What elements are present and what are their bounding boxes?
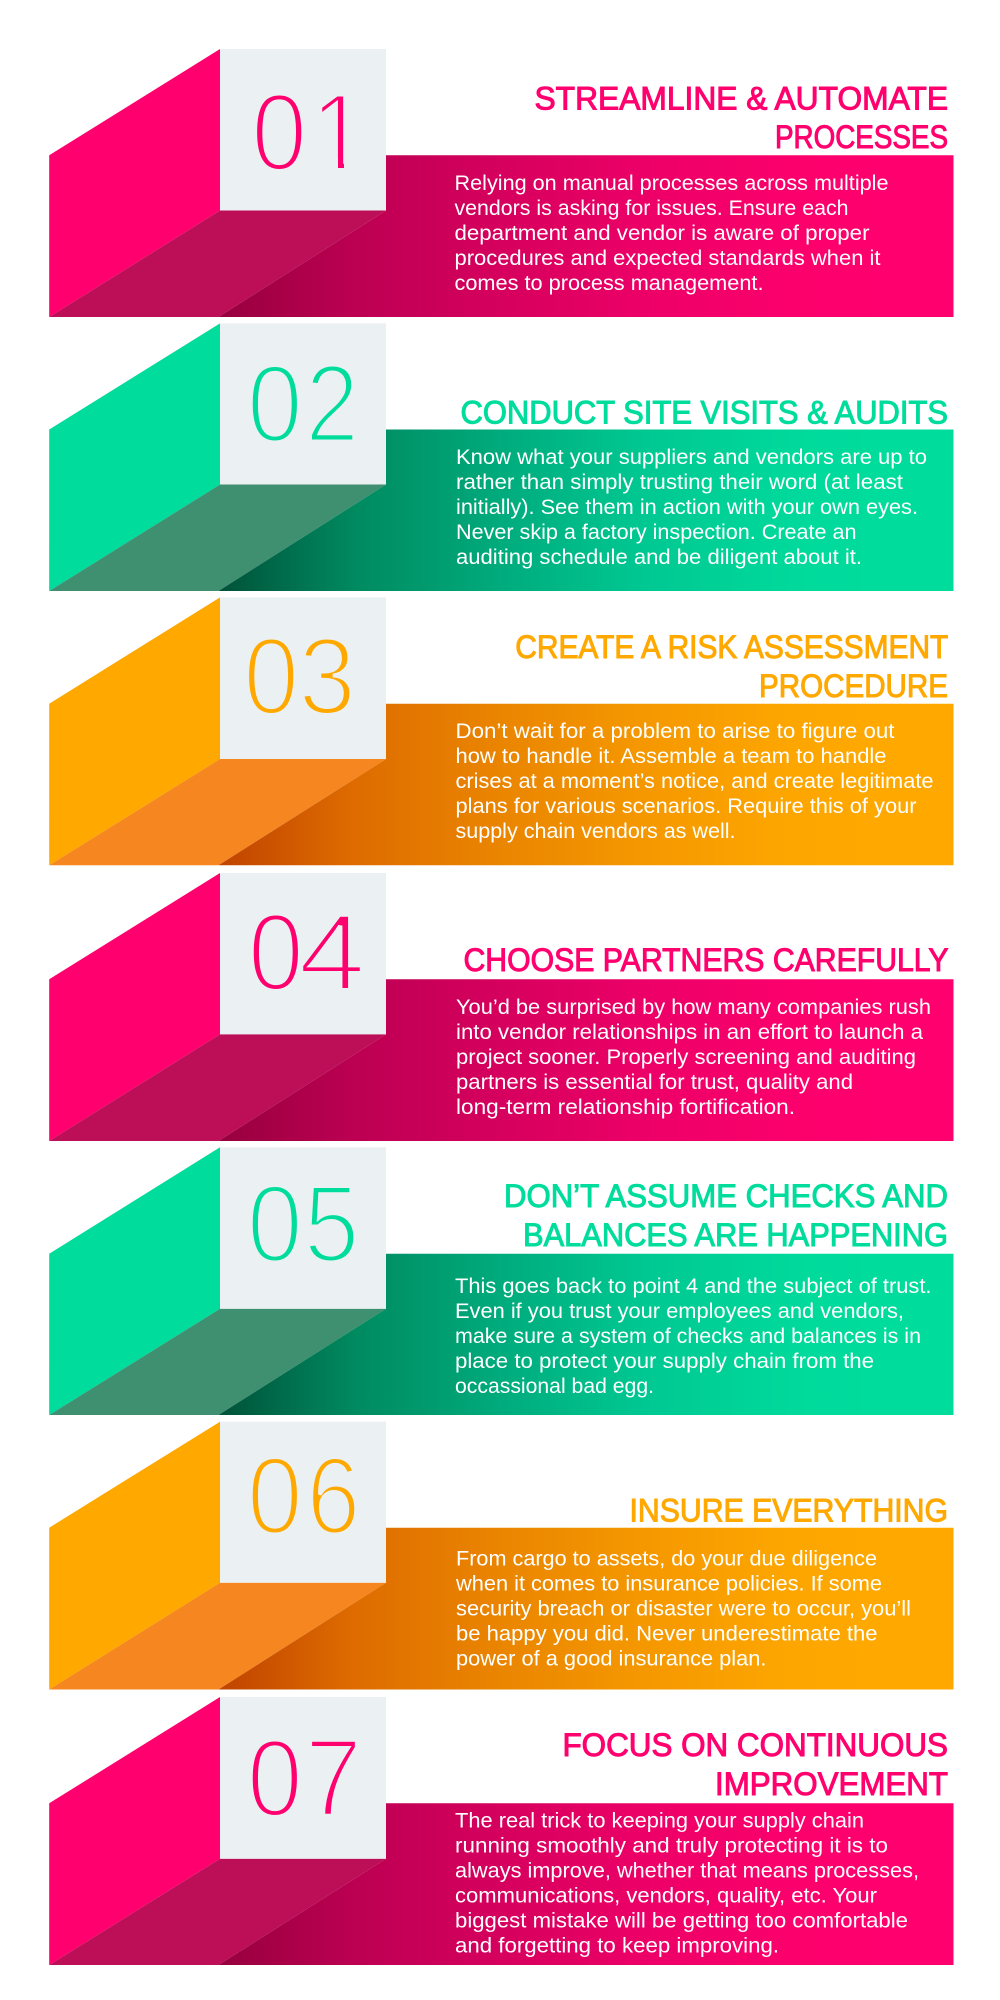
number 03 [243, 614, 356, 738]
left face [49, 597, 220, 865]
gradient bar [218, 979, 954, 1141]
body text: vendors is asking for issues. Ensure each [454, 196, 848, 220]
panel: 01 streamline and automate processes [49, 49, 953, 317]
gradient bar [218, 1528, 954, 1690]
heading: IMPROVEMENT [715, 1766, 948, 1802]
panel: 05 do not assume checks and balances are happening [49, 1147, 953, 1415]
floor face [49, 484, 386, 591]
body text: The real trick to keeping your supply chain [455, 1808, 864, 1832]
body text [456, 995, 931, 1119]
number 06: 6 [306, 1434, 360, 1557]
body text: comes to process management. [454, 271, 764, 295]
body text [455, 1274, 932, 1398]
number tile [220, 1422, 386, 1583]
left face [49, 49, 220, 317]
heading: PROCESSES [775, 119, 948, 155]
number tile [220, 1697, 386, 1859]
number 01: 0 [251, 72, 307, 194]
gradient bar [218, 704, 954, 865]
floor face [49, 759, 386, 865]
left face [49, 1697, 220, 1965]
number 05 [247, 1163, 359, 1286]
number tile [220, 1147, 386, 1309]
gradient bar [218, 430, 954, 591]
panel: 06 insure everything [49, 1422, 953, 1690]
floor face [49, 1859, 386, 1965]
heading: DON’T ASSUME CHECKS AND [504, 1178, 948, 1214]
body text: security breach or disaster were to occur, you’ll [456, 1597, 911, 1621]
body text: You’d be surprised by how many companies rush [456, 995, 931, 1019]
number 07 [247, 1717, 362, 1840]
body text [455, 1547, 911, 1671]
body text [455, 1808, 919, 1957]
body text: rather than simply trusting their word (at least [456, 470, 903, 494]
number 02 [247, 342, 359, 466]
heading [562, 1727, 948, 1802]
panel: 07 focus on continuous improvement [49, 1697, 953, 1965]
heading: FOCUS ON CONTINUOUS [562, 1727, 948, 1763]
gradient bar [218, 1803, 954, 1965]
body text: auditing schedule and be diligent about it. [456, 545, 862, 569]
body text: occassional bad egg. [455, 1374, 654, 1398]
number 06 [247, 1434, 360, 1558]
body text: running smoothly and truly protecting it is to [455, 1833, 888, 1857]
body text: and forgetting to keep improving. [455, 1933, 779, 1957]
number 04 [248, 890, 366, 1014]
number 01 [251, 71, 370, 194]
body text: procedures and expected standards when it [454, 246, 881, 270]
number 04: 0 [248, 892, 304, 1014]
left face [49, 1147, 220, 1415]
body text: be happy you did. Never underestimate the [456, 1622, 878, 1646]
body text: Even if you trust your employees and vendors, [455, 1299, 904, 1323]
body text: Know what your suppliers and vendors are up to [456, 445, 927, 469]
body text: long-term relationship fortification. [456, 1095, 795, 1119]
heading [515, 629, 948, 704]
body text: how to handle it. Assemble a team to handle [456, 744, 886, 768]
body text: This goes back to point 4 and the subject of trust. [455, 1274, 932, 1298]
body text: always improve, whether that means processes, [455, 1858, 919, 1882]
body text: initially). See them in action with your own eyes. [456, 495, 918, 519]
number 02: 0 [247, 343, 303, 466]
heading: CONDUCT SITE VISITS & AUDITS [460, 394, 948, 430]
body text: supply chain vendors as well. [456, 819, 736, 843]
left face [49, 873, 220, 1141]
body text: partners is essential for trust, quality and [456, 1070, 853, 1094]
number 06: 0 [247, 1435, 303, 1558]
left face [49, 323, 220, 591]
floor face [49, 1309, 386, 1415]
heading: CHOOSE PARTNERS CAREFULLY [464, 942, 948, 978]
panel: 02 conduct site visits and audits [49, 323, 953, 591]
body text: Relying on manual processes across multiple [454, 171, 888, 195]
heading: CREATE A RISK ASSESSMENT [515, 629, 948, 665]
number 04: 4 [298, 890, 366, 1014]
body text: department and vendor is aware of proper [454, 221, 870, 245]
body text: From cargo to assets, do your due diligence [456, 1547, 877, 1571]
number tile [220, 49, 386, 210]
body text: plans for various scenarios. Require this of your [456, 794, 916, 818]
panel: 03 create a risk assessment procedure [49, 597, 953, 865]
number tile [220, 597, 386, 759]
body text: crises at a moment’s notice, and create legitimate [456, 769, 934, 793]
gradient bar [218, 155, 954, 317]
gradient bar [218, 1254, 954, 1415]
number 02: 2 [305, 342, 359, 465]
heading [534, 80, 948, 155]
body text [456, 445, 927, 569]
floor face [49, 1034, 386, 1141]
body text: biggest mistake will be getting too comfortable [455, 1908, 908, 1932]
heading: BALANCES ARE HAPPENING [523, 1217, 948, 1253]
number 03: 0 [243, 616, 299, 738]
number 07: 0 [247, 1718, 303, 1840]
heading: STREAMLINE & AUTOMATE [534, 80, 948, 116]
body text [454, 171, 888, 295]
body text [456, 719, 934, 843]
heading [504, 1178, 948, 1253]
floor face [49, 1583, 386, 1690]
number tile [220, 323, 386, 484]
number 01: 1 [311, 71, 367, 194]
body text: make sure a system of checks and balances is in [455, 1324, 921, 1348]
heading: INSURE EVERYTHING [630, 1493, 948, 1529]
body text: project sooner. Properly screening and auditing [456, 1045, 916, 1069]
number 05: 0 [247, 1163, 303, 1286]
left face [49, 1422, 220, 1690]
body text: communications, vendors, quality, etc. Your [455, 1883, 877, 1907]
number tile [220, 873, 386, 1034]
body text: power of a good insurance plan. [456, 1647, 766, 1671]
number 07: 7 [305, 1717, 362, 1840]
floor face [49, 210, 386, 317]
body text: Don’t wait for a problem to arise to figure out [456, 719, 895, 743]
body text: Never skip a factory inspection. Create an [456, 520, 856, 544]
number 05: 5 [304, 1163, 359, 1286]
heading: PROCEDURE [759, 668, 948, 704]
body text: place to protect your supply chain from the [455, 1349, 874, 1373]
number 03: 3 [298, 614, 356, 738]
panel: 04 choose partners carefully [49, 873, 953, 1141]
body text: when it comes to insurance policies. If some [455, 1572, 882, 1596]
body text: into vendor relationships in an effort to launch a [456, 1020, 923, 1044]
